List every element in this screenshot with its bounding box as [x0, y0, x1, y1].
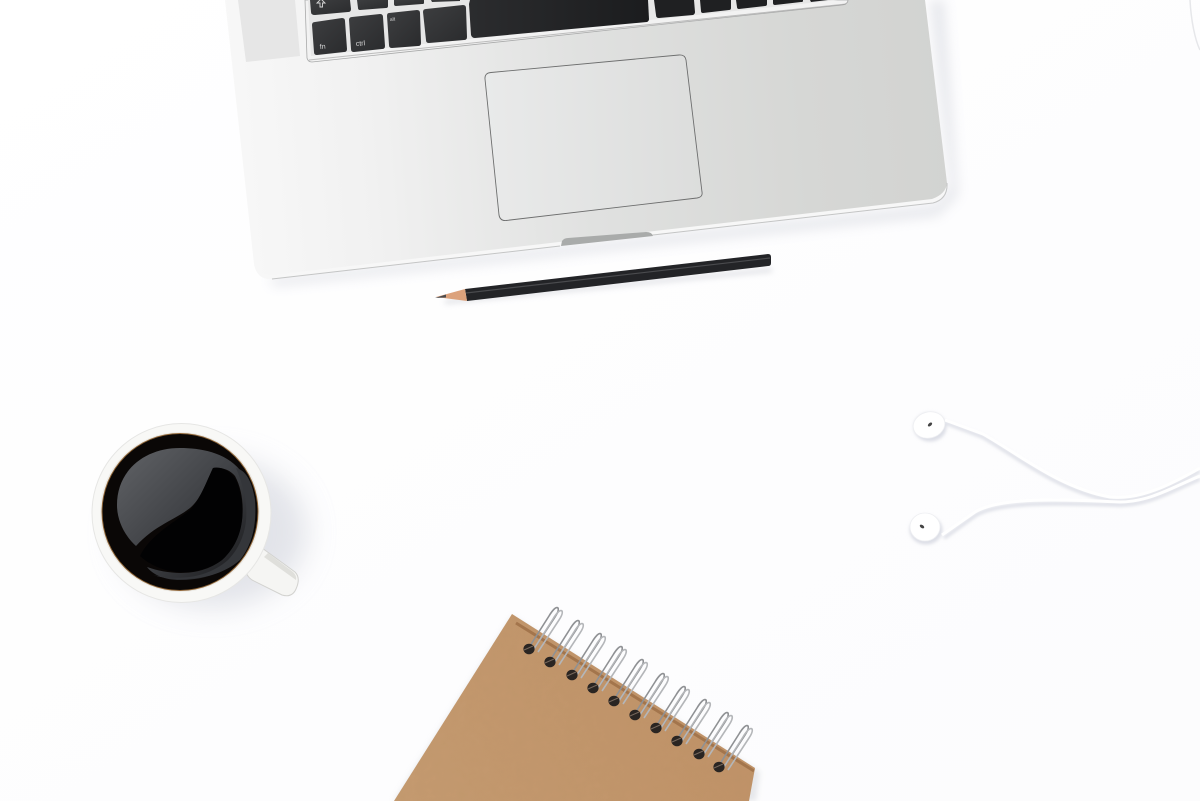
bottom cable with stem	[942, 476, 1200, 535]
earphones	[910, 408, 1200, 544]
pencil	[435, 254, 772, 302]
key: fn: fn	[320, 44, 326, 51]
earphone shadows	[910, 413, 1200, 544]
laptop	[225, 0, 958, 286]
coffee cup	[92, 424, 307, 608]
shift arrow glyph	[317, 0, 325, 7]
pencil shadow	[445, 270, 772, 302]
notebook cover	[394, 614, 755, 801]
notebook shadow	[394, 616, 760, 801]
top cable with stem	[945, 420, 1200, 497]
key: right option	[700, 0, 731, 13]
pencil lead	[435, 294, 446, 298]
keys	[310, 0, 828, 55]
key: arrow	[810, 0, 828, 2]
keyboard well interior	[308, 0, 838, 56]
bottom earbud	[910, 513, 940, 541]
pencil wood tip	[436, 289, 467, 301]
key: command	[423, 5, 467, 43]
speaker grille	[238, 0, 300, 62]
cup inner wall	[100, 432, 260, 592]
key: row two	[431, 0, 460, 2]
cup rim	[92, 424, 271, 602]
key: ctrl: ctrl	[356, 40, 366, 48]
notebook paper grain	[394, 614, 755, 801]
coffee	[102, 434, 258, 590]
key: right command	[654, 0, 695, 18]
bottom edge line	[272, 183, 947, 279]
key: row two	[357, 0, 388, 10]
handle top shade	[264, 553, 296, 580]
coffee edge	[102, 433, 258, 591]
cup handle	[246, 548, 298, 596]
top earbud	[910, 408, 948, 442]
keyboard well	[305, 0, 848, 62]
coffee reflection	[117, 448, 254, 580]
cup shadow	[117, 456, 307, 608]
lid notch	[561, 232, 653, 246]
key: alt	[387, 10, 421, 48]
notebook binding crease	[516, 623, 754, 771]
laptop shadow	[268, 0, 958, 286]
key: space bar	[469, 0, 649, 38]
key: ctrl	[349, 14, 385, 52]
laptop body	[225, 0, 947, 279]
pencil highlight	[466, 258, 770, 293]
key: arrow	[773, 0, 803, 5]
keyboard lip highlight	[309, 4, 846, 60]
key: arrow	[736, 0, 767, 9]
trackpad	[485, 55, 702, 221]
notebook	[394, 608, 760, 801]
key: shift	[310, 0, 351, 15]
reflection lower crescent	[153, 468, 255, 579]
key: fn	[312, 18, 347, 55]
key: row two	[394, 0, 424, 6]
laptop front edge	[254, 183, 947, 279]
spiral rings	[523, 608, 752, 772]
key: alt: alt	[390, 17, 396, 23]
pencil body	[465, 254, 771, 301]
coffee reflection dark center	[140, 468, 242, 572]
stray cable at top right	[1190, 0, 1200, 50]
